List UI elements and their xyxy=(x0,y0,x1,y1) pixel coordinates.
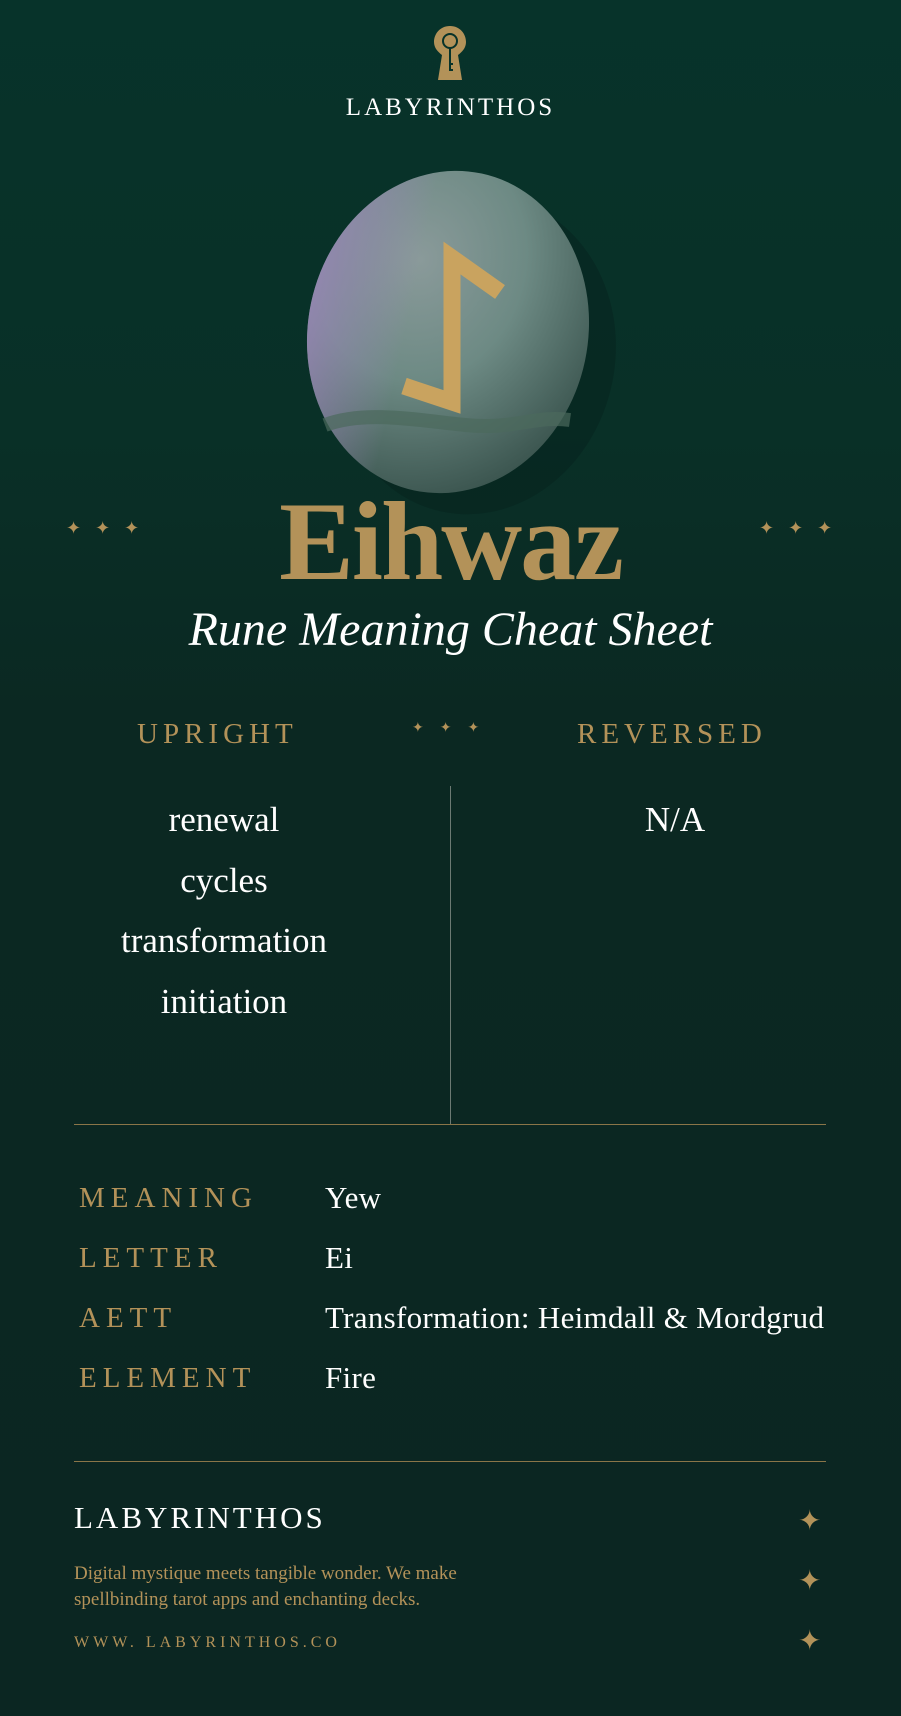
subtitle: Rune Meaning Cheat Sheet xyxy=(189,603,712,656)
footer description xyxy=(74,1563,457,1610)
footer stars xyxy=(798,1506,821,1657)
upright keywords: initiation xyxy=(161,982,287,1020)
footer description: spellbinding tarot apps and enchanting decks. xyxy=(74,1589,420,1610)
footer description: Digital mystique meets tangible wonder. We make xyxy=(74,1563,457,1584)
rune glyph xyxy=(404,258,500,402)
footer brand: LABYRINTHOS xyxy=(74,1500,326,1535)
details table: ELEMENT xyxy=(79,1362,256,1394)
footer stars: ✦ xyxy=(798,1566,821,1597)
upright keywords: renewal xyxy=(169,800,279,839)
details table: Yew xyxy=(325,1180,381,1215)
reversed heading: REVERSED xyxy=(577,718,767,750)
details table: Fire xyxy=(325,1360,376,1395)
upright heading: UPRIGHT xyxy=(137,718,298,750)
footer stars: ✦ xyxy=(798,1626,821,1657)
upright keywords xyxy=(121,800,327,1020)
footer stars: ✦ xyxy=(798,1506,821,1537)
rune stone image xyxy=(306,170,596,494)
details table: Ei xyxy=(325,1240,353,1275)
details table: Transformation: Heimdall & Mordgrud xyxy=(325,1300,824,1335)
upright keywords: transformation xyxy=(121,921,327,960)
details table: MEANING xyxy=(79,1182,258,1214)
top brand name: LABYRINTHOS xyxy=(346,94,555,121)
reversed keywords: N/A xyxy=(645,800,705,839)
logo key icon xyxy=(434,26,466,80)
stars right: ✦✦✦ xyxy=(759,518,846,538)
details table: AETT xyxy=(79,1302,177,1334)
stars left: ✦✦✦ xyxy=(66,518,153,538)
stars middle: ✦✦✦ xyxy=(412,721,495,736)
website: WWW. LABYRINTHOS.CO xyxy=(74,1634,341,1651)
details table: LETTER xyxy=(79,1242,223,1274)
upright keywords: cycles xyxy=(180,860,268,900)
details table xyxy=(79,1180,824,1395)
title: Eihwaz xyxy=(279,480,622,604)
